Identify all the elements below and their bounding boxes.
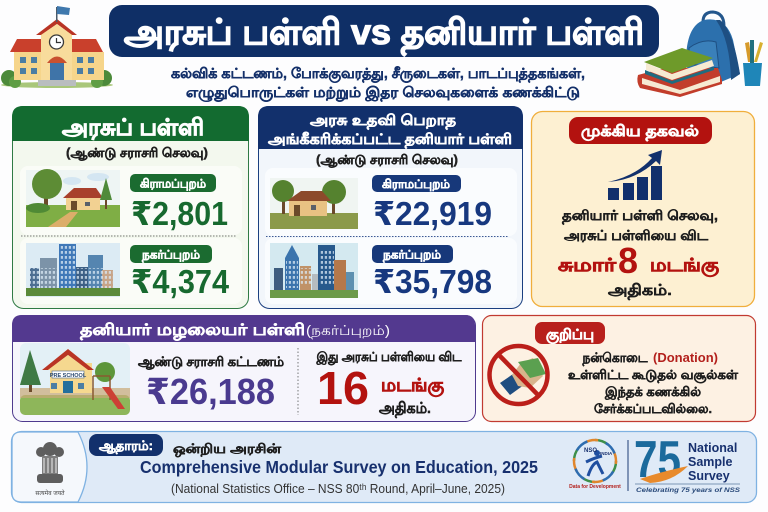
logo: 75 National Sample Survey xyxy=(634,431,741,494)
panel header: private unaided school xyxy=(258,106,523,149)
panel header: private unaided school: அரசு உதவி பெறாத xyxy=(310,112,457,130)
subtitle: எழுதுபொருட்கள் மற்றும் இதர செலவுகளைக் கணக்கிட்டு xyxy=(186,84,580,102)
logo: 75 National Sample Survey: Survey xyxy=(688,469,730,483)
icon: national emblem: सत्यमेव जयते xyxy=(35,489,65,497)
label: urban xyxy=(130,245,212,263)
comparison: 16 times more: 16 xyxy=(317,362,369,414)
value: 22,919: ₹22,919 xyxy=(373,195,492,232)
icon: rising bar chart xyxy=(608,150,662,200)
logo: 75 National Sample Survey: Sample xyxy=(688,455,733,469)
panel header: government school xyxy=(12,106,249,141)
source text xyxy=(140,441,538,496)
note text: உள்ளிட்ட கூடுதல் வசூல்கள் xyxy=(568,368,739,383)
label: urban xyxy=(372,245,453,263)
illustration: city skyline xyxy=(26,243,120,297)
comparison: 16 times more: மடங்கு xyxy=(381,375,444,397)
label: urban: நகர்ப்புறம் xyxy=(382,248,441,262)
comparison: 16 times more: இது அரசுப் பள்ளியை விட xyxy=(316,350,462,365)
note text: (Donation) xyxy=(653,350,718,365)
subtitle xyxy=(171,65,585,102)
label: rural xyxy=(130,174,216,192)
value: 2,801: ₹2,801 xyxy=(131,195,228,232)
panel: note xyxy=(482,316,756,422)
logo: 75 National Sample Survey: 75 xyxy=(634,431,681,489)
source text: Comprehensive Modular Survey on Education, 2025 xyxy=(140,457,538,477)
value: 4,374: ₹4,374 xyxy=(131,263,230,300)
note text: சேர்க்கப்படவில்லை. xyxy=(594,402,712,416)
value: 35,798: ₹35,798 xyxy=(373,263,492,300)
key text: சுமார் xyxy=(558,255,617,275)
key text: 8 xyxy=(618,240,638,281)
annual average label: (ஆண்டு சராசரி செலவு) xyxy=(66,146,208,161)
logo: NSO India: Data for Development xyxy=(569,484,621,490)
source badge xyxy=(89,434,163,456)
icon: backpack, books and pencils xyxy=(637,12,763,97)
title banner: அரசுப் பள்ளி vs தனியார் பள்ளி xyxy=(124,13,644,56)
logo: NSO India: NSO xyxy=(584,448,597,454)
icon: no donation xyxy=(490,346,548,404)
panel header: private unaided school: அங்கீகரிக்கப்பட்ட தனியார் பள்ளி xyxy=(268,131,512,149)
note text: நன்கொடை xyxy=(582,350,648,366)
illustration: rural house and tree xyxy=(26,169,120,227)
label: annual average fee: ஆண்டு சராசரி கட்டணம் xyxy=(138,354,285,370)
icon: school building xyxy=(1,6,113,88)
key text xyxy=(558,208,719,300)
value: 26,188: ₹26,188 xyxy=(146,371,275,412)
panel header: pre-primary: தனியார் மழலையர் பள்ளி xyxy=(80,322,305,340)
key text: அரசுப் பள்ளியை விட xyxy=(564,228,709,243)
panel header: pre-primary: (நகர்ப்புறம்) xyxy=(306,323,390,339)
logo: NSO India xyxy=(569,440,621,490)
key information badge: முக்கிய தகவல் xyxy=(581,123,699,141)
comparison: 16 times more xyxy=(316,350,462,418)
illustration: pre school building: PRE SCHOOL xyxy=(50,373,87,379)
logo: 75 National Sample Survey: National xyxy=(688,441,737,455)
panel header: government school: அரசுப் பள்ளி xyxy=(62,114,204,140)
source badge: ஆதாரம்: xyxy=(99,438,153,454)
note text xyxy=(568,350,739,416)
panel header: pre-primary xyxy=(12,315,475,342)
subtitle: கல்விக் கட்டணம், போக்குவரத்து, சீருடைகள், பாடப்புத்தகங்கள், xyxy=(171,65,585,83)
panel: source footer xyxy=(12,431,756,502)
label: rural: கிராமப்புறம் xyxy=(382,177,450,191)
illustration: city towers xyxy=(270,243,358,298)
source text: ஒன்றிய அரசின் xyxy=(173,441,281,457)
panel: private pre-primary school xyxy=(12,315,476,422)
title banner xyxy=(109,5,659,57)
illustration: pre school building xyxy=(20,343,130,415)
illustration: rural cottage xyxy=(270,178,358,229)
panel: private unaided school xyxy=(258,106,523,308)
logo: 75 National Sample Survey: Celebrating 75 years of NSS xyxy=(636,487,741,494)
logo: NSO India: INDIA xyxy=(600,451,613,456)
label: rural: கிராமப்புறம் xyxy=(140,176,206,190)
note badge xyxy=(535,322,605,344)
label: rural xyxy=(372,175,461,192)
label: urban: நகர்ப்புறம் xyxy=(141,248,200,262)
key text: அதிகம். xyxy=(608,282,672,300)
note badge: குறிப்பு xyxy=(546,326,594,344)
panel: key information xyxy=(532,112,754,306)
panel: government school xyxy=(12,106,249,308)
icon: national emblem xyxy=(35,442,65,497)
key text: மடங்கு xyxy=(650,255,719,277)
key text: தனியார் பள்ளி செலவு, xyxy=(562,208,718,225)
source text: (National Statistics Office – NSS 80ᵗʰ Round, April–June, 2025) xyxy=(171,481,505,496)
annual average label: (ஆண்டு சராசரி செலவு) xyxy=(316,153,458,168)
comparison: 16 times more: அதிகம். xyxy=(379,400,431,418)
key information badge xyxy=(569,117,712,144)
note text: இந்தக் கணக்கில் xyxy=(604,385,702,400)
